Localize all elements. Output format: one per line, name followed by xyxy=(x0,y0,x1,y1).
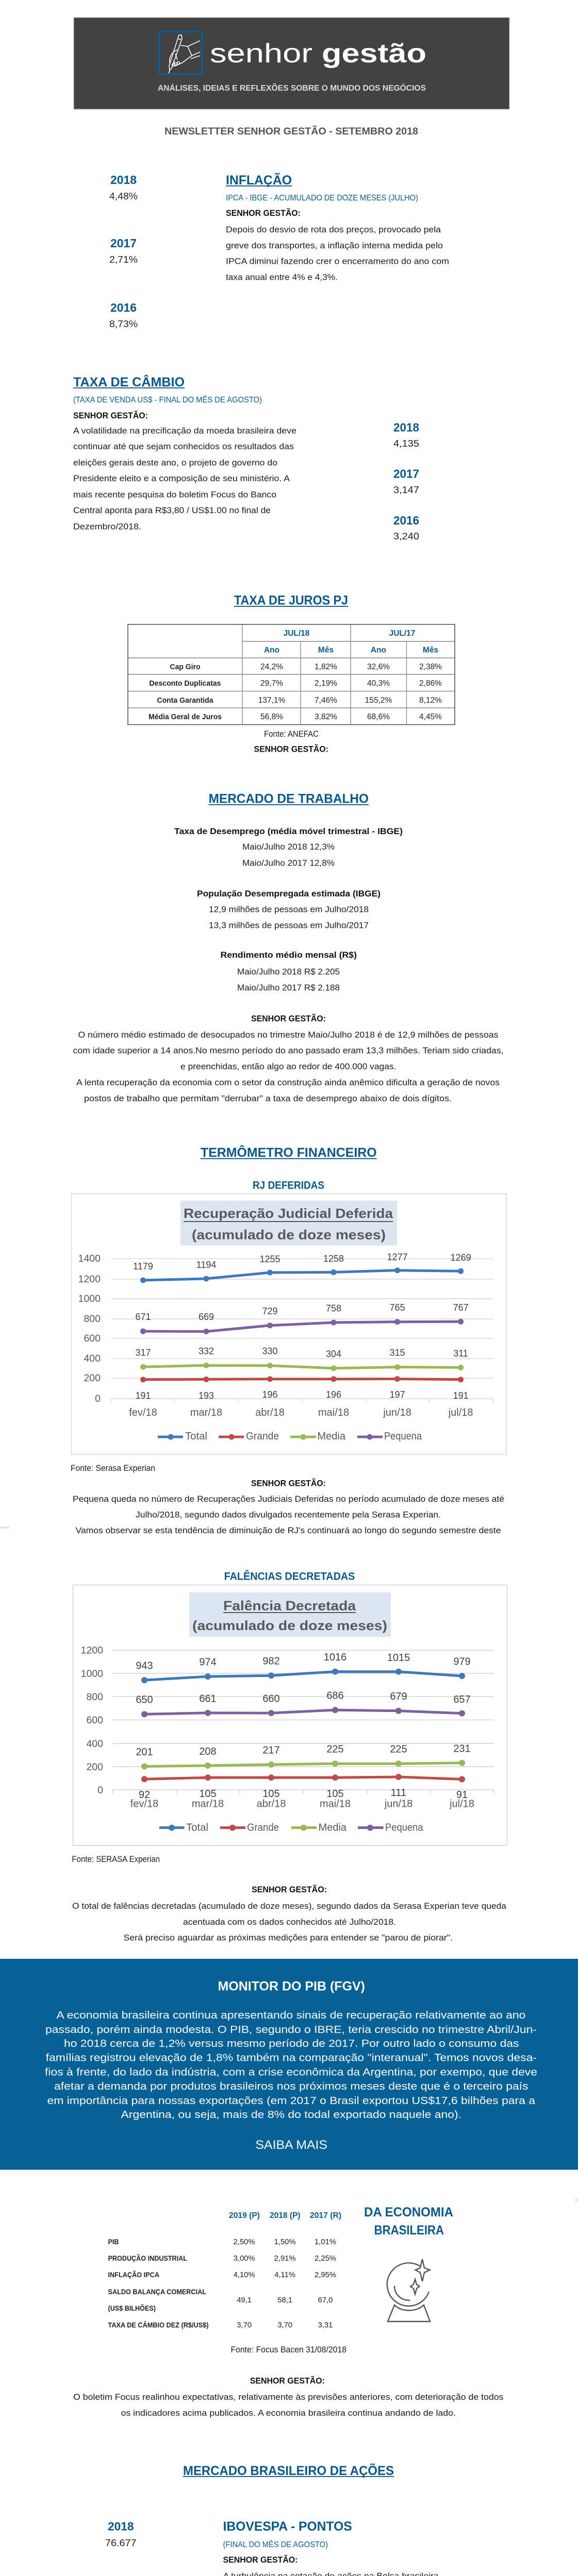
panel: inflation text: INFLAÇÃO xyxy=(226,172,292,188)
legend: Total xyxy=(185,1431,207,1442)
panel: inflation text: taxa anual entre 4% e 4,3%. xyxy=(226,273,338,282)
data labels: 1255 xyxy=(259,1254,280,1264)
chart y axis: 0 xyxy=(97,1785,103,1796)
legend: Pequena xyxy=(384,1431,422,1442)
data labels: 765 xyxy=(390,1302,405,1313)
panel paragraph: A economia brasileira continua apresentando sinais de recuperação relativamente ao ano xyxy=(56,2010,525,2021)
data labels: 197 xyxy=(390,1389,405,1400)
heading: financial thermometer: TERMÔMETRO FINANCEIRO xyxy=(201,1145,377,1160)
table: focus expectations: 4,10% xyxy=(234,2271,255,2279)
x axis labels: jun/18 xyxy=(383,1407,411,1418)
table: interest rates: 3,82% xyxy=(315,713,337,721)
RJ source and comment: SENHOR GESTÃO: xyxy=(251,1478,326,1488)
chart y axis: 200 xyxy=(84,1372,101,1384)
table: interest rates: Conta Garantida xyxy=(157,697,213,705)
panel heading: MONITOR DO PIB (FGV) xyxy=(218,1979,365,1994)
series: grande xyxy=(141,1774,465,1783)
data labels: 1277 xyxy=(387,1252,408,1262)
x axis labels: mar/18 xyxy=(192,1799,224,1810)
panel paragraph: famílias registrou elevação de 1,8% também na comparação "interanual". Temos novos desa- xyxy=(46,2053,537,2064)
panel: exchange rate yearly values: 2018 xyxy=(393,420,419,434)
table: focus expectations: 3,70 xyxy=(237,2321,252,2330)
labor market comment: SENHOR GESTÃO: xyxy=(251,1013,326,1024)
series: grande xyxy=(140,1376,464,1382)
x axis labels: mar/18 xyxy=(190,1407,222,1418)
panel: ibovespa text xyxy=(223,2519,448,2576)
table: focus expectations: 3,00% xyxy=(234,2255,255,2263)
panel: exchange rate text: Central aponta para R$3,80 / US$1.00 no final de xyxy=(73,506,271,515)
panel: exchange rate yearly values: 3,147 xyxy=(393,485,419,495)
table: focus expectations: TAXA DE CÂMBIO DEZ (R$/US$) xyxy=(108,2320,208,2329)
chart y axis: 1400 xyxy=(78,1253,101,1264)
table: interest rates: 4,45% xyxy=(419,713,442,721)
data labels: 758 xyxy=(326,1303,341,1314)
table: interest rates: 29,7% xyxy=(260,679,283,688)
labor market comment: e preenchidas, então algo ao redor de 400.000 vagas. xyxy=(180,1062,396,1072)
panel: inflation text: IPCA - IBGE - ACUMULADO DE DOZE MESES (JULHO) xyxy=(226,194,418,202)
chart y axis: 1200 xyxy=(78,1274,101,1285)
data labels: 317 xyxy=(135,1347,151,1358)
data labels: 979 xyxy=(453,1656,471,1668)
data labels: 729 xyxy=(262,1306,278,1316)
data labels: 661 xyxy=(199,1693,217,1705)
data labels: 105 xyxy=(326,1788,344,1800)
data labels: 193 xyxy=(199,1391,214,1401)
table: interest rates: 1,82% xyxy=(315,663,337,671)
legend: Pequena xyxy=(385,1822,423,1833)
chart y axis xyxy=(78,1253,101,1404)
RJ source and comment: Vamos observar se esta tendência de diminuição de RJ's continuará ao longo do segundo semestre deste xyxy=(75,1526,501,1535)
data labels: 208 xyxy=(199,1746,217,1757)
x axis labels xyxy=(129,1407,473,1418)
panel: exchange rate yearly values: 3,240 xyxy=(393,531,419,541)
data labels xyxy=(136,1652,471,1801)
chart y axis: 0 xyxy=(95,1393,101,1404)
chart y axis: 1200 xyxy=(81,1645,103,1656)
panel: ibovespa yearly values: 2018 xyxy=(108,2519,134,2533)
series: media xyxy=(141,1760,465,1770)
table: interest rates: Desconto Duplicatas xyxy=(150,680,221,688)
chart title xyxy=(180,1200,397,1246)
interest rates source and comment xyxy=(254,730,328,754)
x axis labels: mai/18 xyxy=(318,1407,349,1418)
table: interest rates: 137,1% xyxy=(258,696,285,705)
data labels: 1194 xyxy=(196,1260,216,1270)
panel: inflation yearly values: 8,73% xyxy=(109,319,138,329)
table: focus expectations: 3,31 xyxy=(318,2321,333,2330)
legend xyxy=(158,1431,422,1442)
heading: economy forecasts: DA ECONOMIA xyxy=(364,2205,453,2219)
table: interest rates: Média Geral de Juros xyxy=(148,713,222,721)
chart y axis: 400 xyxy=(86,1738,103,1750)
series: media xyxy=(140,1363,464,1371)
panel: inflation text: IPCA diminui fazendo crer o encerramento do ano com xyxy=(226,257,449,266)
panel: FGV GDP monitor xyxy=(0,1959,578,2170)
logo wordmark xyxy=(210,39,426,69)
table: focus expectations: PRODUÇÃO INDUSTRIAL xyxy=(108,2253,187,2262)
table: interest rates: Cap Giro xyxy=(170,663,201,671)
panel: exchange rate text: TAXA DE CÂMBIO xyxy=(73,374,185,389)
panel: labor market figures: 12,9 milhões de pessoas em Julho/2018 xyxy=(209,905,369,914)
chart title: (acumulado de doze meses) xyxy=(192,1227,386,1243)
panel: inflation yearly values: 2017 xyxy=(110,236,137,250)
table: focus expectations: INFLAÇÃO IPCA xyxy=(108,2270,159,2279)
table: focus expectations: (US$ BILHÕES) xyxy=(108,2303,156,2312)
legend: Media xyxy=(319,1822,347,1833)
data labels: 225 xyxy=(390,1744,407,1755)
x axis labels: abr/18 xyxy=(257,1799,286,1810)
table: focus expectations: 2019 (P) xyxy=(229,2211,260,2220)
heading: labor market: MERCADO DE TRABALHO xyxy=(209,792,369,806)
panel: labor market figures: População Desempregada estimada (IBGE) xyxy=(197,889,381,899)
panel: inflation yearly values: 2018 xyxy=(110,173,137,187)
table: interest rates: 40,3% xyxy=(367,679,390,688)
data labels: 679 xyxy=(390,1691,407,1702)
table: interest rates: 2,19% xyxy=(315,679,337,688)
data labels: 686 xyxy=(326,1690,344,1702)
data labels: 1015 xyxy=(387,1652,410,1664)
panel: exchange rate text: Dezembro/2018. xyxy=(73,522,141,532)
bankruptcies source and comment: SENHOR GESTÃO: xyxy=(252,1884,327,1894)
RJ source and comment: Julho/2018, segundo dados divulgados recentemente pela Serasa Experian. xyxy=(136,1510,441,1519)
table: interest rates: 24,2% xyxy=(260,663,283,671)
chart y axis: 600 xyxy=(84,1333,101,1344)
panel: exchange rate yearly values: 4,135 xyxy=(393,438,419,449)
read more link: SAIBA MAIS xyxy=(255,2138,327,2152)
focus source and comment: Fonte: Focus Bacen 31/08/2018 xyxy=(231,2345,346,2354)
panel: inflation yearly values: 2,71% xyxy=(109,255,138,265)
panel: exchange rate yearly values: 2016 xyxy=(393,514,419,527)
panel: exchange rate text: SENHOR GESTÃO: xyxy=(73,410,148,420)
data labels: 225 xyxy=(326,1744,344,1755)
labor market comment: A lenta recuperação da economia com o setor da construção ainda anêmico dificulta a geração de novos xyxy=(76,1078,500,1087)
table: focus expectations: PIB xyxy=(108,2238,119,2246)
bankruptcies source and comment: Fonte: SERASA Experian xyxy=(72,1855,160,1864)
heading: corporate interest rates: TAXA DE JUROS PJ xyxy=(234,594,348,608)
panel: labor market figures: Maio/Julho 2017 R$ 2.188 xyxy=(237,983,340,992)
panel: labor market figures: Taxa de Desemprego (média móvel trimestral - IBGE) xyxy=(174,827,403,836)
table: interest rates: 155,2% xyxy=(365,696,392,705)
x axis labels: fev/18 xyxy=(129,1407,157,1418)
heading: stock market: MERCADO BRASILEIRO DE AÇÕES xyxy=(183,2463,394,2478)
panel: exchange rate text: mais recente pesquisa do boletim Focus do Banco xyxy=(73,490,276,500)
logo wordmark: senhor xyxy=(210,39,312,69)
table: focus expectations: 2,91% xyxy=(274,2255,296,2263)
panel paragraph: ho 2018 cerca de 1,2% versus mesmo período de 2017. Por outro lado o consumo das xyxy=(64,2038,519,2049)
data labels: 1179 xyxy=(133,1261,153,1272)
table: interest rates: JUL/18 xyxy=(284,629,310,638)
x axis labels xyxy=(130,1799,474,1810)
newsletter title: NEWSLETTER SENHOR GESTÃO - SETEMBRO 2018 xyxy=(164,126,418,137)
table: interest rates: Mês xyxy=(423,646,438,654)
x axis labels: jun/18 xyxy=(384,1799,412,1810)
heading: economy forecasts: BRASILEIRA xyxy=(374,2223,444,2238)
table: interest rates: 7,46% xyxy=(315,696,337,705)
series: pequena xyxy=(140,1319,464,1334)
focus source and comment: os indicadores acima publicados. A economia brasileira continua andando de lado. xyxy=(121,2409,456,2418)
data labels: 1258 xyxy=(323,1253,344,1264)
table: focus expectations: 2017 (R) xyxy=(310,2211,341,2220)
panel: labor market figures: Maio/Julho 2017 12,8% xyxy=(242,858,335,868)
x axis labels: jul/18 xyxy=(449,1799,474,1810)
panel: inflation yearly values xyxy=(109,173,138,329)
chart y axis: 400 xyxy=(84,1353,101,1364)
panel: exchange rate yearly values xyxy=(393,420,419,541)
data labels: 92 xyxy=(139,1789,150,1801)
table: focus expectations xyxy=(108,2211,341,2330)
tagline: ANÁLISES, IDEIAS E REFLEXÕES SOBRE O MUNDO DOS NEGÓCIOS xyxy=(158,83,426,93)
chart y axis: 1000 xyxy=(81,1668,103,1680)
panel: ibovespa text: (FINAL DO MÊS DE AGOSTO) xyxy=(223,2539,328,2549)
logo wordmark: gestão xyxy=(322,39,426,69)
data labels: 315 xyxy=(390,1347,405,1358)
data labels: 943 xyxy=(136,1660,153,1672)
chart title: Recuperação Judicial Deferida xyxy=(184,1206,393,1221)
panel: inflation text xyxy=(226,172,449,282)
RJ source and comment: Fonte: Serasa Experian xyxy=(71,1464,155,1473)
table: focus expectations: 67,0 xyxy=(318,2296,333,2304)
data labels: 650 xyxy=(136,1694,153,1706)
panel paragraph: afetar a demanda por produtos brasileiros nos próximos meses deste que é o terceiro país xyxy=(54,2081,528,2092)
icon: logo hand writing with pen xyxy=(159,32,202,74)
panel: exchange rate yearly values: 2017 xyxy=(393,467,419,481)
data labels: 671 xyxy=(135,1312,151,1322)
panel: exchange rate text: (TAXA DE VENDA US$ - FINAL DO MÊS DE AGOSTO) xyxy=(73,395,262,404)
table: interest rates: JUL/17 xyxy=(389,629,415,638)
data labels: 196 xyxy=(262,1389,278,1400)
data labels: 231 xyxy=(453,1743,471,1755)
data labels: 311 xyxy=(453,1348,468,1359)
table: interest rates: Ano xyxy=(371,646,386,654)
panel: ibovespa yearly values: 76.677 xyxy=(105,2538,136,2548)
legend: Grande xyxy=(246,1431,279,1442)
panel: exchange rate text: Presidente eleito e a composição de seu ministério. A xyxy=(73,474,290,483)
data labels: 191 xyxy=(135,1391,151,1401)
table: interest rates: 68,6% xyxy=(367,713,390,721)
legend: Media xyxy=(318,1431,346,1442)
chart y axis: 800 xyxy=(86,1691,103,1703)
legend xyxy=(159,1822,423,1833)
data labels: 191 xyxy=(453,1391,469,1401)
panel: exchange rate text: A volatilidade na precificação da moeda brasileira deve xyxy=(73,426,296,435)
chart y axis: 800 xyxy=(84,1313,101,1325)
table: focus expectations: 2018 (P) xyxy=(270,2211,301,2220)
heading: economy forecasts xyxy=(364,2205,453,2238)
table: focus expectations: 2,25% xyxy=(315,2255,336,2263)
panel: exchange rate text xyxy=(73,374,296,532)
panel: labor market figures: Rendimento médio mensal (R$) xyxy=(221,951,357,960)
data labels: 91 xyxy=(456,1789,468,1801)
panel: inflation text: SENHOR GESTÃO: xyxy=(226,208,301,218)
panel: ibovespa yearly values xyxy=(105,2519,136,2576)
panel: labor market figures xyxy=(174,827,403,992)
table: interest rates: 8,12% xyxy=(419,696,442,705)
legend: Total xyxy=(186,1822,208,1833)
panel paragraph: fios à frente, do lado da indústria, com a crise econômica da Argentina, por exempo, que deve xyxy=(45,2066,537,2078)
header banner xyxy=(74,18,509,109)
table: interest rates: 56,8% xyxy=(260,713,283,721)
table: interest rates: 32,6% xyxy=(367,663,390,671)
data labels: 974 xyxy=(199,1657,217,1668)
chart title xyxy=(189,1592,391,1637)
chart y axis xyxy=(81,1645,103,1796)
table: focus expectations: 3,70 xyxy=(277,2321,292,2330)
panel: inflation yearly values: 2016 xyxy=(110,301,137,314)
panel: ibovespa text: SENHOR GESTÃO: xyxy=(223,2554,298,2565)
series: total xyxy=(140,1267,464,1283)
data labels: 196 xyxy=(326,1389,341,1400)
data labels: 660 xyxy=(262,1693,280,1705)
data labels: 201 xyxy=(136,1747,153,1758)
panel: labor market figures: 13,3 milhões de pessoas em Julho/2017 xyxy=(209,921,369,930)
x axis labels: abr/18 xyxy=(255,1407,285,1418)
focus source and comment: SENHOR GESTÃO: xyxy=(250,2376,325,2386)
table: focus expectations: 1,01% xyxy=(315,2238,336,2246)
labor market comment: O número médio estimado de desocupados no trimestre Maio/Julho 2018 é de 12,9 milhões de pessoas xyxy=(78,1030,498,1040)
chart y axis: 200 xyxy=(86,1761,103,1773)
x axis labels: fev/18 xyxy=(130,1799,158,1810)
table: interest rates: Ano xyxy=(264,646,279,654)
data labels: 304 xyxy=(326,1349,341,1359)
table: interest rates: 2,86% xyxy=(419,679,442,688)
labor market comment: com idade superior a 14 anos.No mesmo período do ano passado eram 13,3 milhões. Teriam sido criadas, xyxy=(73,1046,504,1056)
data labels: 1269 xyxy=(451,1252,471,1263)
panel: inflation text: greve dos transportes, a inflação interna medida pelo xyxy=(226,241,443,250)
panel: exchange rate text: continuar até que sejam conhecidos os resultados das xyxy=(73,442,294,451)
panel: labor market figures: Maio/Julho 2018 R$ 2.205 xyxy=(237,968,340,977)
line chart: judicial recovery granted xyxy=(71,1194,506,1454)
subheading: falencias decretadas: FALÊNCIAS DECRETADAS xyxy=(224,1570,355,1582)
chart title: Falência Decretada xyxy=(223,1598,356,1614)
data labels: 669 xyxy=(199,1312,214,1322)
data labels: 657 xyxy=(453,1694,471,1705)
data labels: 111 xyxy=(391,1787,406,1799)
bankruptcies source and comment: acentuada com os dados conhecidos até Julho/2018. xyxy=(183,1918,396,1927)
interest rates source and comment: Fonte: ANEFAC xyxy=(264,730,319,739)
subheading: RJ deferidas: RJ DEFERIDAS xyxy=(253,1180,324,1192)
data labels: 217 xyxy=(262,1745,280,1756)
table: focus expectations: 4,11% xyxy=(274,2271,295,2279)
series: pequena xyxy=(141,1707,465,1717)
bankruptcies source and comment: O total de falências decretadas (acumulado de doze meses), segundo dados da Serasa Experian teve queda xyxy=(72,1902,507,1911)
panel paragraph: passado, porém ainda modesta. O PIB, segundo o IBRE, teria crescido no trimestre Abril/Jun- xyxy=(45,2024,537,2036)
table: focus expectations: 2,50% xyxy=(234,2238,255,2246)
bankruptcies source and comment xyxy=(72,1855,507,1942)
table: interest rates: 2,38% xyxy=(419,663,442,671)
chart y axis: 1000 xyxy=(78,1293,101,1304)
table: focus expectations: 49,1 xyxy=(237,2296,252,2304)
table: interest rates xyxy=(128,624,455,724)
data labels: 767 xyxy=(453,1302,469,1313)
x axis labels: mai/18 xyxy=(320,1799,351,1810)
panel paragraph: em importância para nossas exportações (em 2017 o Brasil exportou US$17,6 bilhões para a xyxy=(47,2095,536,2107)
data labels: 1016 xyxy=(324,1652,346,1663)
data labels xyxy=(133,1252,471,1401)
chart y axis: 600 xyxy=(86,1715,103,1726)
legend: Grande xyxy=(247,1822,279,1833)
table: focus expectations: 1,50% xyxy=(274,2238,296,2246)
panel paragraph xyxy=(45,2010,537,2121)
table: focus expectations: SALDO BALANÇA COMERCIAL xyxy=(108,2287,206,2296)
panel: ibovespa text: IBOVESPA - PONTOS xyxy=(223,2519,352,2534)
labor market comment xyxy=(73,1013,504,1104)
data labels: 330 xyxy=(262,1346,278,1357)
data labels: 105 xyxy=(262,1788,280,1800)
table: focus expectations: 2,95% xyxy=(315,2271,336,2279)
line chart: bankruptcies declared xyxy=(73,1585,507,1845)
panel paragraph: Argentina, ou seja, mais de 8% do todal exportado naquele ano). xyxy=(121,2109,461,2121)
panel: inflation text: Depois do desvio de rota dos preços, provocado pela xyxy=(226,225,441,234)
panel: labor market figures: Maio/Julho 2018 12,3% xyxy=(242,842,335,852)
data labels: 105 xyxy=(199,1788,217,1800)
table: focus expectations: 58,1 xyxy=(277,2296,292,2304)
icon: crystal ball xyxy=(387,2259,430,2321)
data labels: 982 xyxy=(262,1656,280,1667)
focus source and comment: O boletim Focus realinhou expectativas, relativamente às previsões anteriores, com deterioração de todos xyxy=(73,2393,503,2402)
RJ source and comment xyxy=(71,1464,504,1535)
RJ source and comment: Pequena queda no número de Recuperações Judiciais Deferidas no período acumulado de doze meses até xyxy=(73,1495,504,1504)
table: interest rates: Mês xyxy=(318,646,334,654)
x axis labels: jul/18 xyxy=(448,1407,473,1418)
chart title: (acumulado de doze meses) xyxy=(192,1618,387,1633)
data labels: 332 xyxy=(199,1346,214,1357)
bankruptcies source and comment: Será preciso aguardar as próximas medições para entender se "parou de piorar". xyxy=(124,1933,453,1942)
labor market comment: postos de trabalho que permitam "derrubar" a taxa de desemprego abaixo de dois dígitos. xyxy=(84,1094,452,1104)
panel: inflation yearly values: 4,48% xyxy=(109,191,138,201)
interest rates source and comment: SENHOR GESTÃO: xyxy=(254,744,328,754)
panel: exchange rate text: eleições gerais deste ano, o projeto de governo do xyxy=(73,459,277,468)
series: total xyxy=(141,1669,465,1683)
focus source and comment xyxy=(73,2345,503,2418)
